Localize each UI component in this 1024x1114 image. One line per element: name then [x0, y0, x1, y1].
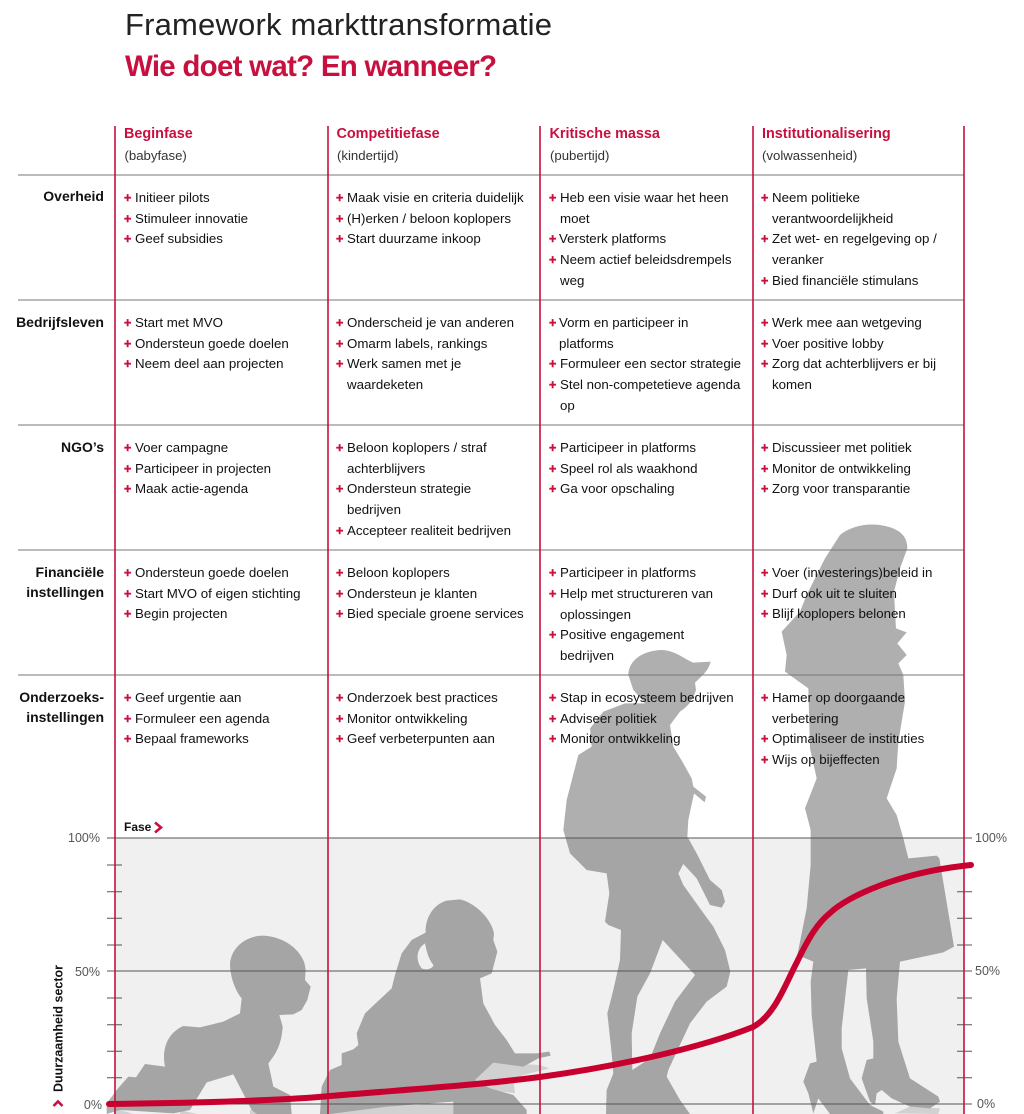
row: Financiële instellingen: + [761, 566, 768, 580]
row: Onderzoeksinstellingen: + [336, 712, 343, 726]
column headers: (babyfase) [124, 148, 187, 163]
row: Overheid: Neem actief beleidsdrempels [560, 252, 732, 267]
row: Overheid: moet [560, 211, 590, 226]
row: Bedrijfsleven: + [761, 316, 768, 330]
row: Financiële instellingen: + [761, 607, 768, 621]
row: Bedrijfsleven: Neem deel aan projecten [135, 356, 284, 371]
row: Onderzoeksinstellingen: Onderzoek best practices [347, 690, 498, 705]
row: Financiële instellingen: Help met structureren van [560, 586, 713, 601]
row: Overheid [124, 190, 937, 288]
row: NGO's: + [124, 441, 131, 455]
row: Onderzoeksinstellingen: + [124, 712, 131, 726]
row: Overheid: + [336, 212, 343, 226]
row: Financiële instellingen: + [124, 587, 131, 601]
row: Overheid: veranker [772, 252, 824, 267]
row: NGO's: + [336, 524, 343, 538]
row: Bedrijfsleven [124, 315, 936, 413]
right axis labels: 100% [975, 831, 1007, 845]
row: Financiële instellingen: Ondersteun je klanten [347, 586, 477, 601]
row: Onderzoeksinstellingen: + [761, 691, 768, 705]
row: Bedrijfsleven: + [336, 316, 343, 330]
row: Bedrijfsleven: op [560, 398, 575, 413]
row: Overheid: Start duurzame inkoop [347, 231, 481, 246]
row: Financiële instellingen: Bied speciale groene services [347, 606, 524, 621]
row: Bedrijfsleven: + [336, 337, 343, 351]
row: Financiële instellingen: bedrijven [560, 648, 614, 663]
row: Bedrijfsleven: + [761, 357, 768, 371]
row: Onderzoeksinstellingen: + [549, 691, 556, 705]
row: Onderzoeksinstellingen: Formuleer een agenda [135, 711, 270, 726]
row: Onderzoeksinstellingen: Hamer op doorgaande [772, 690, 905, 705]
row: NGO's: bedrijven [347, 502, 401, 517]
horizontal row lines [18, 175, 964, 675]
row: NGO's: + [549, 482, 556, 496]
row: NGO's [124, 440, 912, 538]
row: NGO's: Ondersteun strategie [347, 481, 471, 496]
row: Overheid: Stimuleer innovatie [135, 211, 248, 226]
row labels: Overheid [43, 188, 104, 204]
row: Onderzoeksinstellingen: Monitor ontwikkeling [560, 731, 680, 746]
row: Financiële instellingen: Beloon koplopers [347, 565, 450, 580]
row: Overheid: + [761, 274, 768, 288]
row labels: instellingen [26, 584, 104, 600]
row: Bedrijfsleven: platforms [559, 336, 614, 351]
column headers: Competitiefase [336, 126, 440, 142]
left axis labels: 100% [68, 831, 100, 845]
row: Onderzoeksinstellingen: + [549, 712, 556, 726]
column headers: (volwassenheid) [762, 148, 857, 163]
row: NGO's: + [549, 462, 556, 476]
row: NGO's: Monitor de ontwikkeling [772, 461, 911, 476]
row: Overheid: + [761, 191, 768, 205]
row: Financiële instellingen: Participeer in platforms [560, 565, 696, 580]
subtitle: Wie doet wat? En wanneer? [125, 50, 497, 83]
row: NGO's: achterblijvers [347, 461, 426, 476]
row: Financiële instellingen: + [336, 607, 343, 621]
row labels: Onderzoeks- [19, 689, 104, 705]
right axis labels: 0% [977, 1097, 995, 1111]
column headers [124, 126, 891, 163]
row: Bedrijfsleven: Voer positive lobby [772, 336, 884, 351]
column headers: (pubertijd) [550, 148, 609, 163]
row: Overheid: + [549, 191, 556, 205]
row: Onderzoeksinstellingen: Adviseer politiek [560, 711, 657, 726]
left axis labels [68, 831, 102, 1112]
row: NGO's: Discussieer met politiek [772, 440, 912, 455]
row: Financiële instellingen: Voer (investerings)beleid in [772, 565, 932, 580]
row: Onderzoeksinstellingen: + [761, 753, 768, 767]
row: Financiële instellingen: + [336, 587, 343, 601]
column headers: Kritische massa [550, 126, 661, 142]
row: NGO's: Participeer in platforms [560, 440, 696, 455]
row: Bedrijfsleven: Start met MVO [135, 315, 223, 330]
row: NGO's: + [124, 482, 131, 496]
row: Overheid: Maak visie en criteria duidelijk [347, 190, 524, 205]
row: NGO's: + [336, 441, 343, 455]
column headers: (kindertijd) [337, 148, 399, 163]
row: Financiële instellingen: Ondersteun goede doelen [135, 565, 289, 580]
row: Overheid: Heb een visie waar het heen [560, 190, 729, 205]
row: Onderzoeksinstellingen: + [549, 732, 556, 746]
row: NGO's: Zorg voor transparantie [772, 481, 910, 496]
row: Onderzoeksinstellingen: + [124, 732, 131, 746]
row: Overheid: weg [559, 273, 584, 288]
row: Bedrijfsleven: Formuleer een sector strategie [560, 356, 741, 371]
row: Onderzoeksinstellingen: Geef verbeterpunten aan [347, 731, 495, 746]
row: Financiële instellingen [124, 565, 932, 663]
row: Bedrijfsleven: Werk mee aan wetgeving [772, 315, 922, 330]
row: Bedrijfsleven: Vorm en participeer in [559, 315, 688, 330]
row: Overheid: + [336, 232, 343, 246]
row: Financiële instellingen: Begin projecten [135, 606, 227, 621]
row: Onderzoeksinstellingen: + [336, 691, 343, 705]
row: Financiële instellingen: + [761, 587, 768, 601]
row: Onderzoeksinstellingen: Geef urgentie aan [135, 690, 241, 705]
row: NGO's: + [761, 462, 768, 476]
row: Overheid: + [549, 253, 556, 267]
row: Bedrijfsleven: Omarm labels, rankings [347, 336, 488, 351]
row: NGO's: + [549, 441, 556, 455]
row: NGO's: + [761, 441, 768, 455]
row: Onderzoeksinstellingen: Optimaliseer de instituties [772, 731, 925, 746]
row: Financiële instellingen: + [124, 566, 131, 580]
chart background [115, 838, 964, 1114]
row: Onderzoeksinstellingen: Wijs op bijeffecten [772, 752, 880, 767]
row labels [16, 188, 104, 725]
row: Overheid: Geef subsidies [135, 231, 223, 246]
row: NGO's: + [761, 482, 768, 496]
left axis labels: 0% [84, 1098, 102, 1112]
row: NGO's: Participeer in projecten [135, 461, 271, 476]
row: NGO's: Accepteer realiteit bedrijven [347, 523, 511, 538]
row: Bedrijfsleven: Ondersteun goede doelen [135, 336, 289, 351]
row labels: instellingen [26, 709, 104, 725]
row: NGO's: Voer campagne [135, 440, 228, 455]
row: Onderzoeksinstellingen [124, 690, 925, 767]
column headers: Beginfase [124, 126, 193, 142]
row: Financiële instellingen: + [549, 587, 556, 601]
row labels: Bedrijfsleven [16, 314, 104, 330]
row: Financiële instellingen: + [549, 628, 556, 642]
row: Overheid: + [124, 232, 131, 246]
row: Financiële instellingen: Durf ook uit te sluiten [772, 586, 897, 601]
row: Overheid: + [549, 232, 556, 246]
row: Overheid: + [124, 212, 131, 226]
row: Onderzoeksinstellingen: Stap in ecosysteem bedrijven [560, 690, 734, 705]
row: Bedrijfsleven: Zorg dat achterblijvers er bij [772, 356, 936, 371]
silhouette: teenager [563, 650, 730, 1114]
row: Overheid: Zet wet- en regelgeving op / [772, 231, 937, 246]
row: Overheid: verantwoordelijkheid [772, 211, 893, 226]
row: Bedrijfsleven: + [336, 357, 343, 371]
row: Onderzoeksinstellingen: Monitor ontwikkeling [347, 711, 467, 726]
row: Bedrijfsleven: + [124, 316, 131, 330]
row: Onderzoeksinstellingen: Bepaal frameworks [135, 731, 249, 746]
row: Bedrijfsleven: Werk samen met je [347, 356, 461, 371]
row: Bedrijfsleven: + [549, 316, 556, 330]
left axis labels: 50% [75, 965, 100, 979]
row: Onderzoeksinstellingen: + [124, 691, 131, 705]
row: Financiële instellingen: Start MVO of eigen stichting [135, 586, 301, 601]
phase label with arrow: Fase [124, 820, 152, 834]
row: Financiële instellingen: Blijf koplopers belonen [772, 606, 906, 621]
row: NGO's: Maak actie-agenda [135, 481, 249, 496]
row: Financiële instellingen: + [336, 566, 343, 580]
row: Onderzoeksinstellingen: + [761, 732, 768, 746]
right axis labels [975, 831, 1007, 1111]
row: Overheid: + [336, 191, 343, 205]
row: Financiële instellingen: + [124, 607, 131, 621]
row: Overheid: (H)erken / beloon koplopers [347, 211, 511, 226]
row: Bedrijfsleven: + [549, 357, 556, 371]
row: Bedrijfsleven: komen [772, 377, 812, 392]
row: Overheid: Bied financiële stimulans [772, 273, 919, 288]
row: NGO's: + [336, 482, 343, 496]
row: NGO's: + [124, 462, 131, 476]
row: Bedrijfsleven: Stel non-competetieve agenda [560, 377, 741, 392]
row: Financiële instellingen: oplossingen [560, 607, 631, 622]
row: Overheid: Versterk platforms [559, 231, 666, 246]
row: NGO's: Speel rol als waakhond [560, 461, 698, 476]
silhouette: woman [782, 525, 954, 1114]
title: Framework markttransformatie [125, 7, 552, 42]
y axis title with arrow: Duurzaamheid sector [52, 965, 66, 1092]
row: Onderzoeksinstellingen: verbetering [772, 711, 839, 726]
row: Overheid: Initieer pilots [135, 190, 210, 205]
right axis labels: 50% [975, 964, 1000, 978]
row labels: Financiële [36, 564, 104, 580]
row labels: NGO’s [61, 439, 104, 455]
phase column lines [115, 126, 964, 1114]
row: Bedrijfsleven: + [761, 337, 768, 351]
row: Financiële instellingen: Positive engagement [560, 627, 684, 642]
sustainability curve [109, 865, 971, 1104]
row: Bedrijfsleven: Onderscheid je van anderen [347, 315, 514, 330]
row: Overheid: Neem politieke [772, 190, 860, 205]
row: Bedrijfsleven: + [124, 357, 131, 371]
row: NGO's: Ga voor opschaling [560, 481, 675, 496]
row: NGO's: Beloon koplopers / straf [347, 440, 487, 455]
row: Overheid: + [124, 191, 131, 205]
row: Bedrijfsleven: + [549, 378, 556, 392]
column headers: Institutionalisering [762, 126, 891, 142]
silhouette: child [320, 899, 551, 1114]
row: Onderzoeksinstellingen: + [336, 732, 343, 746]
row: Bedrijfsleven: + [124, 337, 131, 351]
axis grid and ticks [107, 838, 972, 1104]
row: Overheid: + [761, 232, 768, 246]
row: Financiële instellingen: + [549, 566, 556, 580]
silhouette: baby [107, 936, 311, 1114]
row: Bedrijfsleven: waardeketen [346, 377, 423, 392]
